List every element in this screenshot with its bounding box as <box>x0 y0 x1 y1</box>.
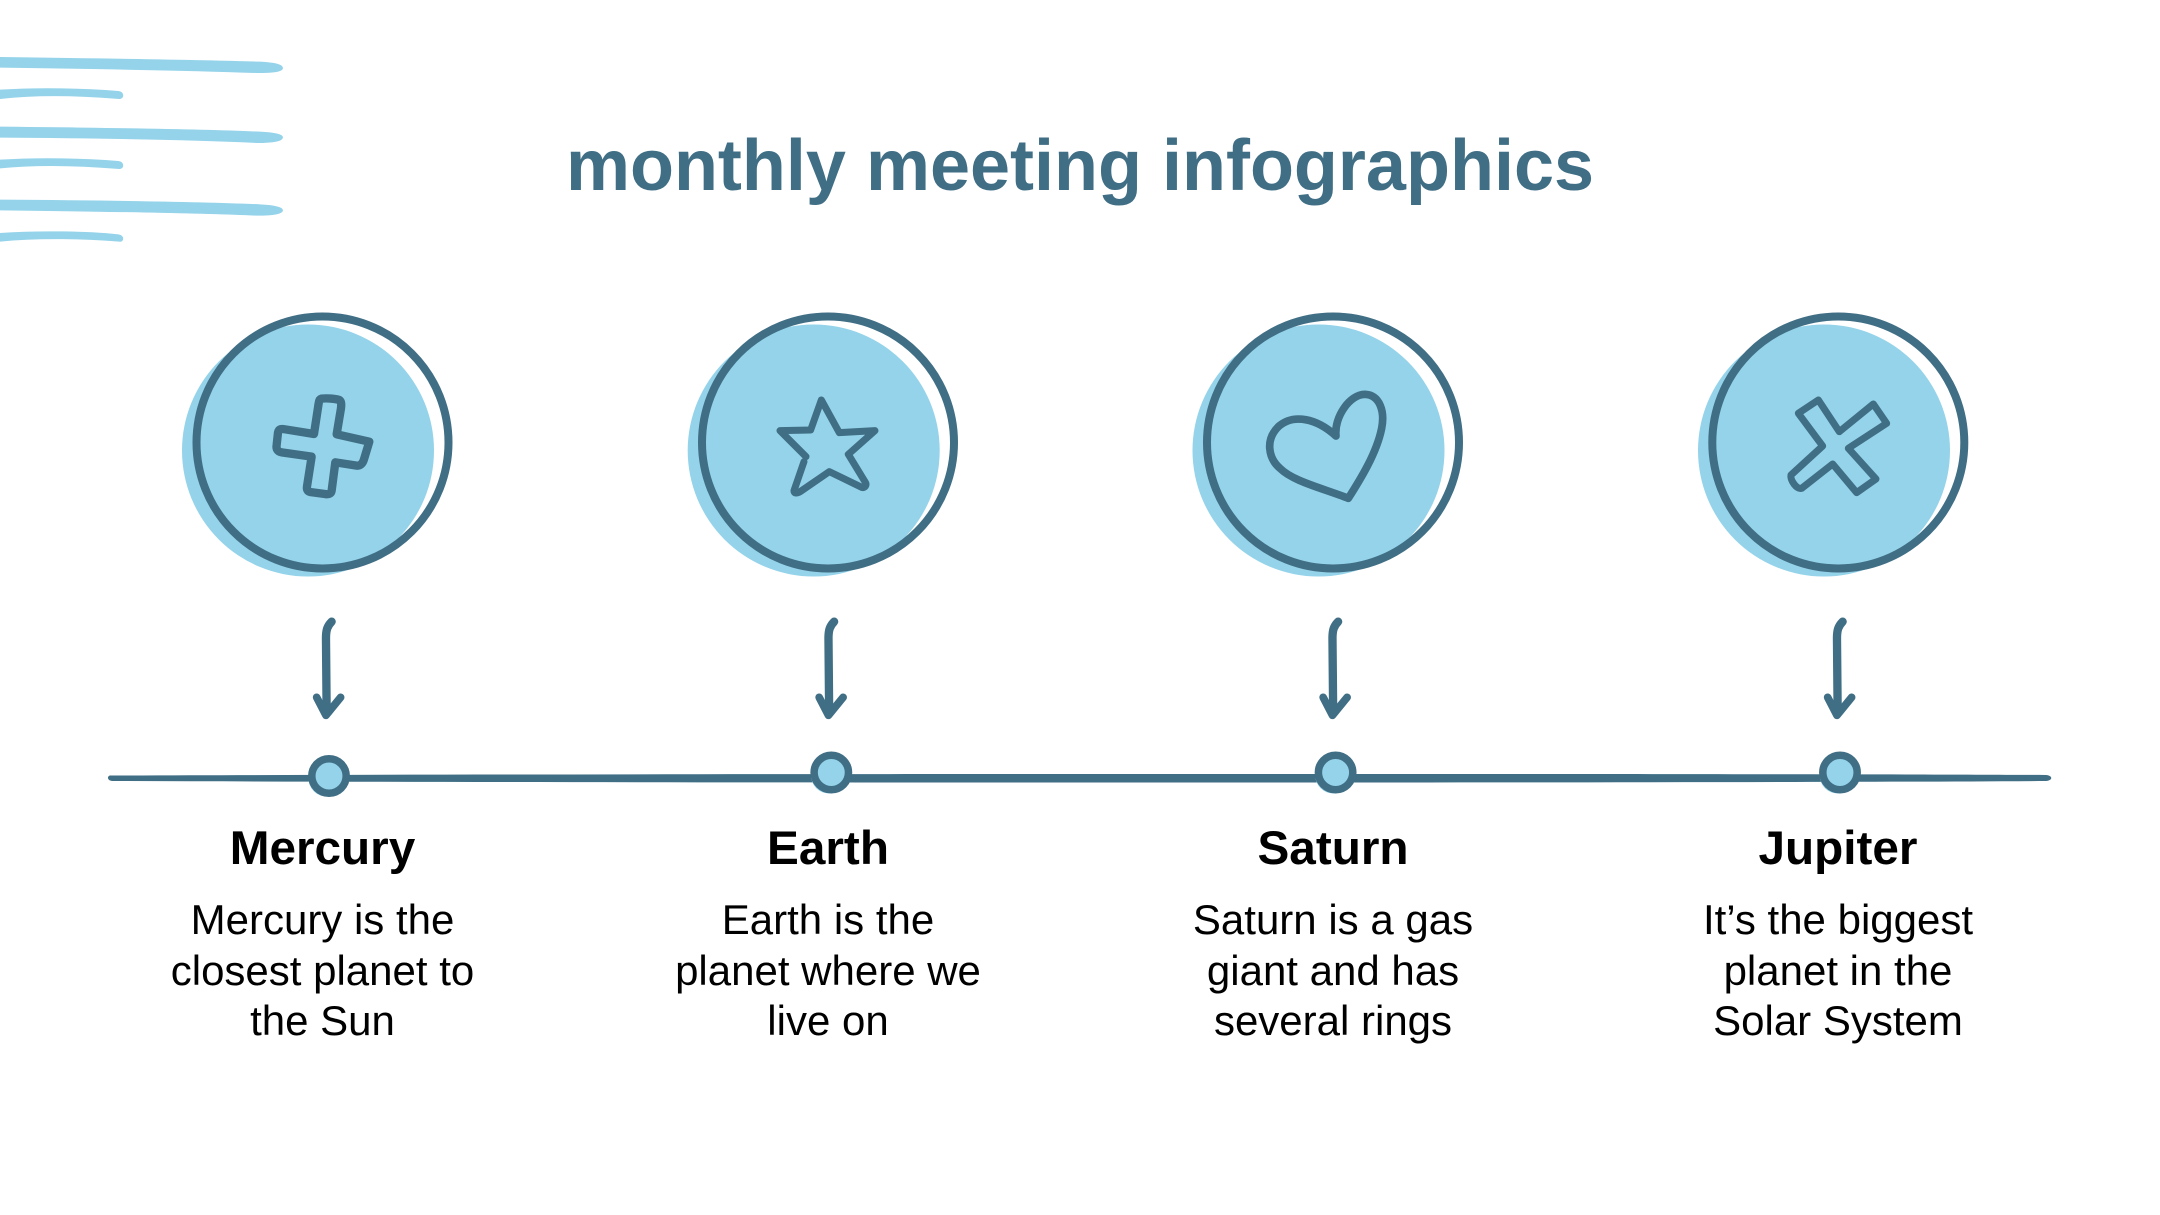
timeline node <box>308 759 346 796</box>
description: Earth: planet where we <box>675 947 981 994</box>
description: Mercury: Mercury is the <box>191 896 454 943</box>
arrow down <box>317 622 341 715</box>
timeline node <box>811 755 848 794</box>
icon: star in circle <box>688 316 954 576</box>
label: Mercury: Mercury <box>230 822 416 875</box>
arrow down <box>1828 622 1852 715</box>
column: Earth <box>675 316 981 1044</box>
column: Mercury <box>171 316 474 1044</box>
timeline line <box>108 774 2051 782</box>
description: Jupiter: Solar System <box>1713 997 1963 1044</box>
timeline node <box>1820 755 1857 794</box>
title: monthly meeting infographics <box>566 126 1594 206</box>
icon: plus in circle <box>182 316 448 576</box>
label: Jupiter: Jupiter <box>1758 822 1918 875</box>
arrow down <box>819 622 843 715</box>
description: Earth: Earth is the <box>722 896 934 943</box>
label: Saturn: Saturn <box>1257 822 1409 875</box>
column: Saturn <box>1192 316 1473 1044</box>
description: Saturn: giant and has <box>1207 947 1459 994</box>
icon: heart in circle <box>1192 316 1459 576</box>
description: Jupiter: planet in the <box>1724 947 1952 994</box>
description: Mercury: closest planet to <box>171 947 474 994</box>
description: Jupiter: It’s the biggest <box>1703 896 1973 943</box>
column: Jupiter <box>1698 316 1973 1044</box>
description: Mercury: the Sun <box>250 997 395 1044</box>
description: Saturn: Saturn is a gas <box>1193 896 1473 943</box>
icon: cross in circle <box>1698 316 1964 576</box>
timeline node <box>1315 755 1353 794</box>
description: Earth: live on <box>767 997 889 1044</box>
description: Saturn: several rings <box>1214 997 1452 1044</box>
arrow down <box>1323 622 1347 715</box>
label: Earth: Earth <box>767 822 889 875</box>
decorative streaks top-left <box>0 58 282 241</box>
